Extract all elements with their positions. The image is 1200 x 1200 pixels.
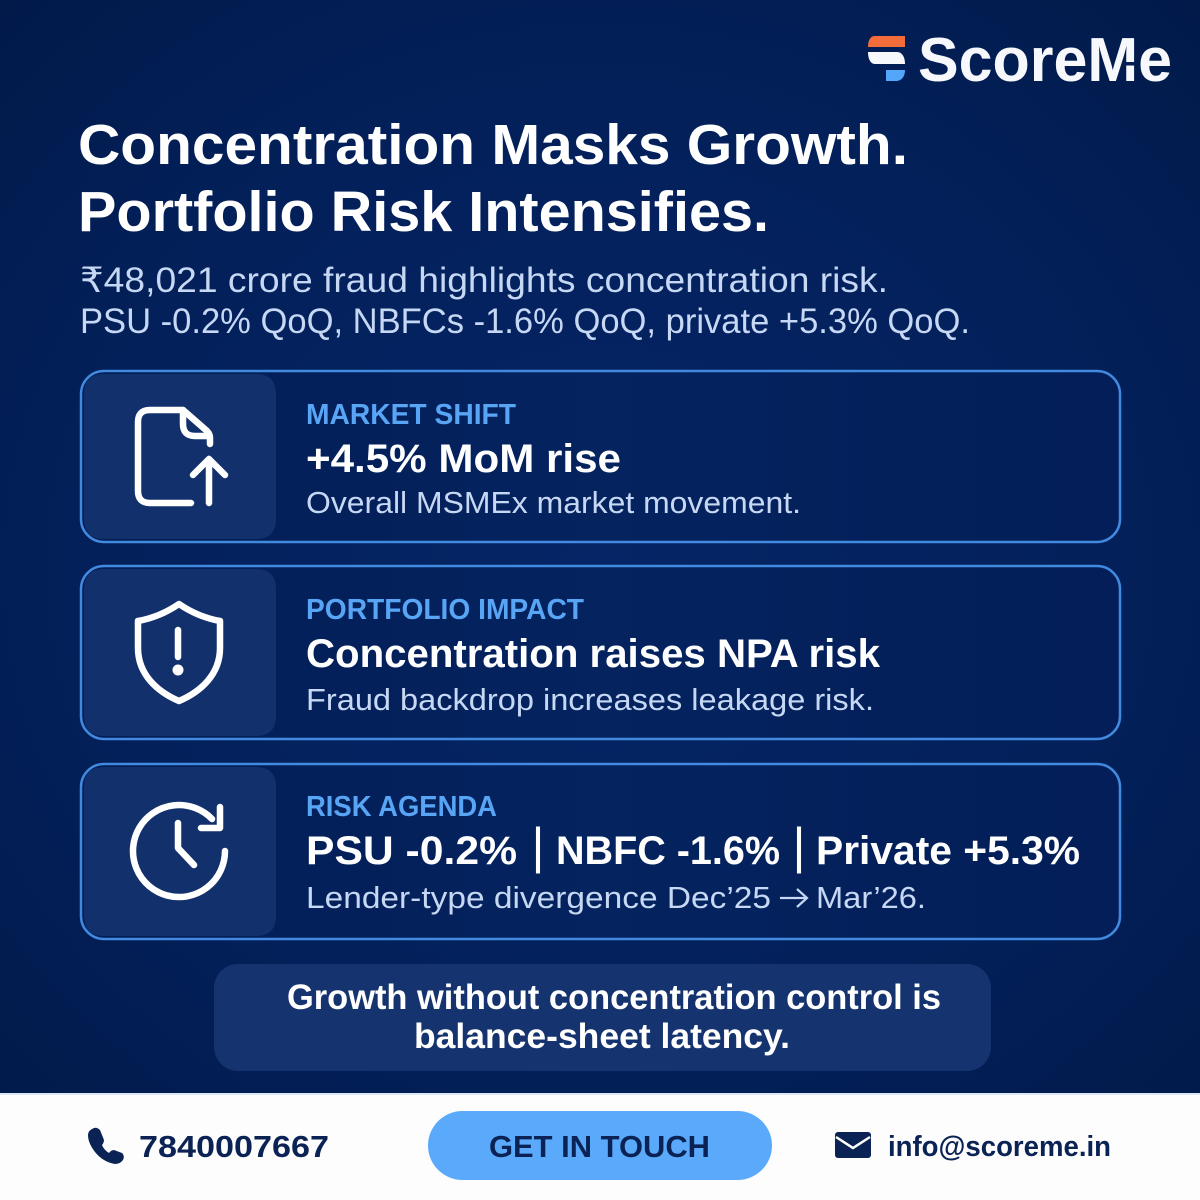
title — [78, 113, 908, 244]
icon: shield with exclamation — [138, 604, 220, 701]
label: RISK AGENDA — [306, 791, 497, 823]
logo wordmark: ScoreMe — [918, 26, 1172, 95]
subtitle — [80, 261, 970, 341]
headline: | — [532, 818, 544, 874]
headline: +4.5% MoM rise — [306, 437, 621, 481]
description: Mar’26. — [816, 880, 926, 915]
panel: portfolio impact — [81, 566, 1120, 739]
icon: logo mark — [868, 36, 905, 81]
button: get in touch: GET IN TOUCH — [489, 1129, 710, 1164]
callout: balance-sheet latency. — [414, 1017, 790, 1056]
title: Concentration Masks Growth. — [78, 113, 908, 177]
button: get in touch — [428, 1111, 772, 1180]
subtitle: PSU -0.2% QoQ, NBFCs -1.6% QoQ, private +5.3% QoQ. — [80, 302, 970, 341]
callout — [214, 964, 991, 1071]
phone number: 7840007667 — [139, 1129, 329, 1164]
description: Lender-type divergence Dec’25 — [306, 880, 771, 915]
headline: | — [792, 818, 806, 874]
headline: Private +5.3% — [816, 829, 1080, 873]
title: Portfolio Risk Intensifies. — [78, 180, 769, 244]
description: Overall MSMEx market movement. — [306, 485, 801, 520]
footer bar — [0, 1093, 1200, 1200]
icon: clock with refresh arrow — [133, 805, 225, 897]
logo: ScoreMe — [868, 26, 1172, 95]
icon: document with up arrow — [138, 410, 225, 503]
label: MARKET SHIFT — [306, 399, 517, 431]
headline: Concentration raises NPA risk — [306, 632, 881, 676]
headline: NBFC -1.6% — [556, 829, 780, 873]
subtitle: ₹48,021 crore fraud highlights concentration risk. — [80, 261, 888, 300]
headline: PSU -0.2% — [306, 829, 517, 873]
icon: envelope — [835, 1132, 871, 1158]
label: PORTFOLIO IMPACT — [306, 594, 585, 626]
icon: phone — [88, 1128, 124, 1164]
email address: info@scoreme.in — [888, 1131, 1111, 1163]
headline — [306, 818, 1080, 874]
description: Fraud backdrop increases leakage risk. — [306, 682, 874, 717]
panel: risk agenda — [81, 764, 1120, 939]
description — [306, 880, 926, 915]
panel: market shift — [81, 371, 1120, 542]
callout: Growth without concentration control is — [287, 978, 941, 1017]
